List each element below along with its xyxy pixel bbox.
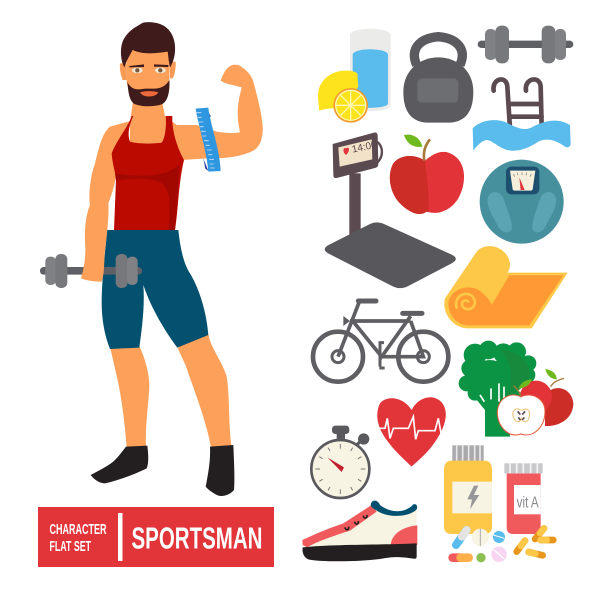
vitamin label: vit A (517, 494, 539, 511)
banner (38, 507, 274, 567)
lower right icons (302, 246, 573, 562)
upper right icons (318, 26, 573, 288)
icon: stopwatch (311, 426, 369, 498)
icon: heart with pulse (377, 397, 446, 467)
shorts (102, 230, 208, 349)
left shoe (91, 446, 148, 483)
pills (453, 528, 553, 562)
icon: bicycle (313, 301, 448, 382)
icon: sneaker (302, 501, 417, 561)
left leg (110, 346, 149, 447)
hair (121, 22, 175, 67)
banner subtitle line two: FLAT SET (50, 539, 91, 555)
beard (127, 80, 169, 106)
banner divider (118, 513, 122, 561)
eyes (132, 67, 166, 73)
icon: broccoli (459, 341, 536, 437)
face (127, 50, 170, 106)
eyebrows (129, 64, 168, 67)
hand (81, 238, 105, 282)
flexed right arm (165, 65, 263, 160)
icon: kettlebell (403, 37, 473, 123)
icon: yoga mat (444, 246, 568, 328)
right shoe (206, 445, 234, 496)
banner subtitle line one: CHARACTER (50, 522, 107, 538)
icon: platform scale with display: 14:00 (351, 140, 378, 156)
icon: red apple (390, 135, 464, 214)
neck and chest skin (130, 100, 177, 147)
tank top (112, 116, 184, 230)
icon: barbell (478, 26, 573, 63)
icon: glass of water with lemon (318, 29, 391, 123)
character: sportsman (40, 22, 263, 496)
icon: apples (497, 369, 573, 435)
right leg (177, 334, 232, 447)
icon: bathroom scale (480, 160, 564, 244)
ears (120, 62, 176, 80)
icon: platform scale with display (325, 133, 456, 288)
banner title: SPORTSMAN (132, 520, 262, 556)
icon: yellow supplement bottle (444, 445, 492, 534)
tank top shadow (115, 165, 179, 230)
icon: vitamin A bottle (504, 463, 543, 534)
held dumbbell (40, 254, 142, 288)
measuring tape (196, 108, 221, 172)
left arm (85, 121, 132, 260)
mouth (140, 91, 158, 96)
icon: swimming pool ladder (473, 79, 571, 151)
upper body (85, 22, 263, 260)
lower body (40, 230, 234, 496)
